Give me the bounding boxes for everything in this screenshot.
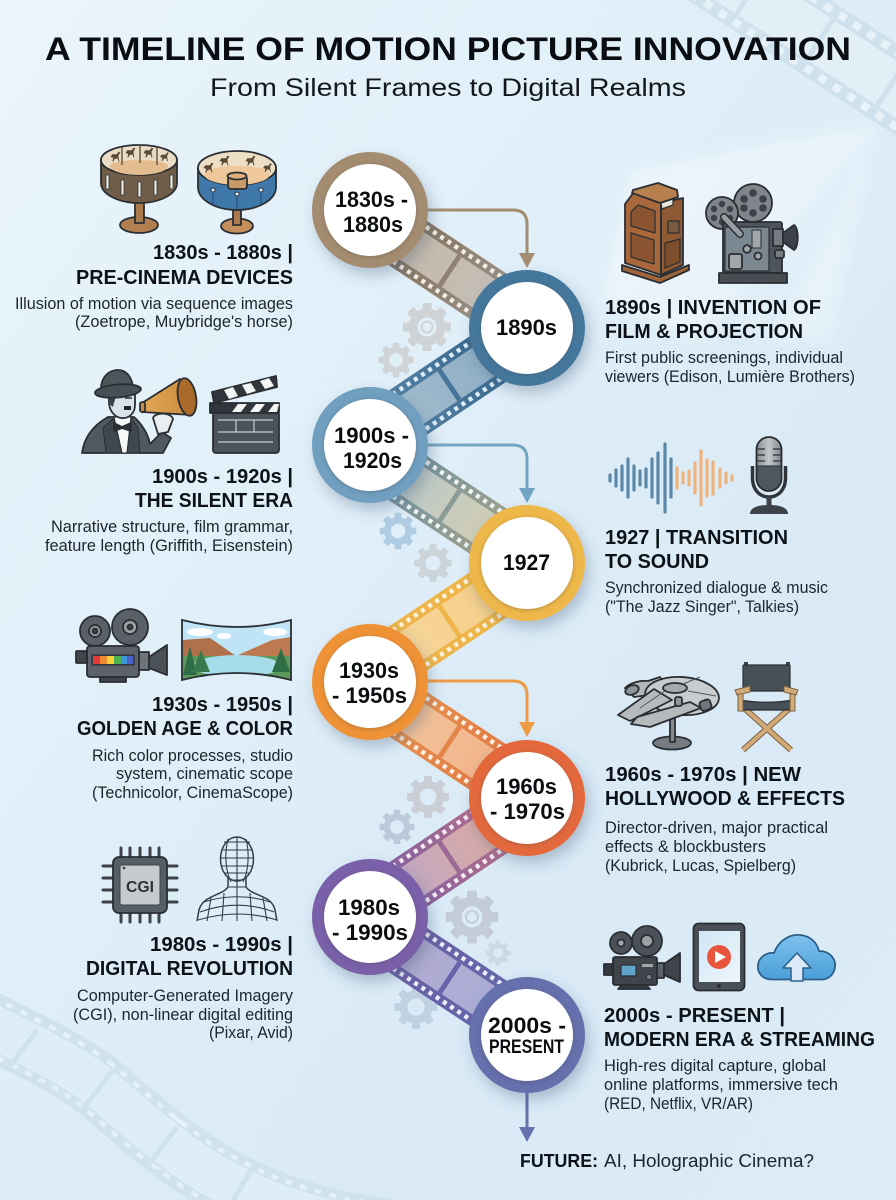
background film strip top right: [687, 0, 896, 141]
description: Rich color processes, studio: [92, 747, 293, 765]
description: (CGI), non-linear digital editing: [73, 1006, 293, 1024]
node: 2000s - present: [469, 977, 585, 1093]
panel: modern era & streaming: [604, 924, 875, 1113]
node: 1890s: [469, 270, 585, 386]
panel: the silent era: [45, 370, 293, 555]
description: (Technicolor, CinemaScope): [92, 784, 293, 802]
heading: [77, 693, 293, 740]
panel: new hollywood & effects: [605, 662, 845, 875]
film strip: 1830s to 1890s: [354, 194, 543, 346]
heading: FILM & PROJECTION: [605, 320, 803, 343]
description: (Pixar, Avid): [209, 1024, 293, 1042]
decorative gears: [379, 303, 510, 1029]
description: [605, 579, 828, 616]
description: High-res digital capture, global: [604, 1057, 826, 1075]
heading: PRE-CINEMA DEVICES: [76, 266, 293, 289]
icon: kinetoscope: [622, 183, 689, 283]
heading: 1960s - 1970s | NEW: [605, 763, 802, 786]
icon: film projector: [706, 184, 798, 283]
title: A TIMELINE OF MOTION PICTURE INNOVATION: [45, 31, 851, 67]
node: 1830s - 1880s: 1830s -: [335, 187, 408, 212]
arrow: 2000s to future: [519, 1092, 535, 1142]
description: [92, 747, 293, 802]
heading: THE SILENT ERA: [135, 489, 293, 512]
description: effects & blockbusters: [605, 838, 766, 856]
arrow: 1930s to 1960s: [426, 681, 535, 737]
description: feature length (Griffith, Eisenstein): [45, 537, 293, 555]
arrow: 1900s to 1927: [426, 445, 535, 503]
description: [73, 987, 294, 1042]
subtitle: From Silent Frames to Digital Realms: [210, 74, 686, 102]
heading: TO SOUND: [605, 550, 709, 573]
heading: 1980s - 1990s |: [150, 933, 293, 956]
node: 1900s - 1920s: 1920s: [343, 448, 402, 473]
heading: [86, 933, 293, 980]
icon: sound waveform: [610, 444, 732, 512]
panel: golden age & color: [76, 609, 293, 802]
film strip: 1927 to 1930s: [354, 545, 542, 698]
heading: [605, 526, 788, 573]
node: 1900s - 1920s: 1900s -: [334, 423, 409, 448]
heading: [604, 1004, 875, 1051]
description: system, cinematic scope: [116, 765, 293, 783]
film strip: 1960s to 1980s: [354, 781, 542, 934]
arrow: 1830s to 1890s: [426, 210, 535, 268]
film strip: 1980s to 2000s: [354, 901, 543, 1053]
description: (Zoetrope, Muybridge's horse): [75, 313, 293, 331]
node: 1960s - 1970s: - 1970s: [490, 799, 565, 824]
node: 1900s - 1920s: [312, 387, 428, 503]
icon: digital cinema camera: [604, 926, 680, 989]
icon: spaceship model: [618, 674, 720, 750]
node: 1960s - 1970s: [469, 740, 585, 856]
node: 1927: [469, 505, 585, 621]
description: [605, 349, 855, 386]
description: Director-driven, major practical: [605, 819, 828, 837]
node: 1927: 1927: [503, 550, 550, 575]
icon: clapperboard: [210, 376, 279, 453]
panel: invention of film & projection: [605, 183, 855, 386]
icon: silent film actor with megaphone: [82, 370, 199, 453]
future callout: AI, Holographic Cinema?: [604, 1150, 814, 1171]
heading: [605, 763, 845, 810]
heading: 2000s - PRESENT |: [604, 1004, 785, 1027]
heading: 1927 | TRANSITION: [605, 526, 788, 549]
node: 1890s: 1890s: [496, 315, 557, 340]
node: 1980s - 1990s: - 1990s: [332, 920, 408, 945]
icon: tablet with play button: [694, 924, 744, 990]
heading: DIGITAL REVOLUTION: [86, 957, 293, 980]
heading: 1890s | INVENTION OF: [605, 296, 821, 319]
description: Computer-Generated Imagery: [77, 987, 294, 1005]
icon: cloud upload: [758, 935, 835, 981]
heading: MODERN ERA & STREAMING: [604, 1028, 875, 1051]
icon: CGI chip: CGI: [126, 879, 154, 896]
heading: 1930s - 1950s |: [152, 693, 293, 716]
description: [604, 1057, 838, 1113]
heading: [135, 465, 293, 512]
panel: transition to sound: [605, 437, 828, 616]
heading: [76, 241, 293, 289]
description: First public screenings, individual: [605, 349, 843, 367]
description: Narrative structure, film grammar,: [51, 518, 293, 536]
description: Illusion of motion via sequence images: [15, 295, 293, 313]
description: Synchronized dialogue & music: [605, 579, 828, 597]
node: 2000s - present: 2000s -: [488, 1013, 566, 1038]
description: [45, 518, 293, 555]
icon: director's chair: [735, 662, 798, 750]
icon: microphone: [750, 437, 788, 514]
icon: zoetrope: [101, 145, 177, 233]
description: ("The Jazz Singer", Talkies): [605, 598, 799, 616]
film strip: 1890s to 1900s: [354, 309, 542, 462]
description: [605, 819, 828, 875]
node: 1980s - 1990s: [312, 859, 428, 975]
node: 1830s - 1880s: 1880s: [343, 212, 403, 237]
panel: pre-cinema devices: [15, 145, 293, 331]
description: (RED, Netflix, VR/AR): [604, 1095, 753, 1113]
heading: GOLDEN AGE & COLOR: [77, 717, 293, 740]
description: online platforms, immersive tech: [604, 1076, 838, 1094]
heading: HOLLYWOOD & EFFECTS: [605, 787, 845, 810]
heading: 1830s - 1880s |: [153, 241, 293, 264]
background light beams: [600, 122, 878, 340]
icon: zoopraxiscope: [198, 151, 276, 234]
node: 1930s - 1950s: - 1950s: [332, 683, 407, 708]
icon: technicolor camera: [76, 609, 167, 682]
panel: digital revolution: [73, 837, 294, 1042]
film strip: 1930s to 1960s: [354, 665, 543, 817]
node: 1960s - 1970s: 1960s: [496, 774, 557, 799]
description: viewers (Edison, Lumière Brothers): [605, 368, 855, 386]
icon: CGI chip: [103, 848, 177, 922]
icon: wireframe human: [197, 837, 277, 921]
heading: [605, 296, 821, 343]
description: [15, 295, 293, 331]
node: 1830s - 1880s: [312, 152, 428, 268]
node: 1930s - 1950s: 1930s: [339, 658, 399, 683]
node: 1980s - 1990s: 1980s: [338, 895, 400, 920]
film strip: 1900s to 1927: [354, 429, 543, 581]
node: 2000s - present: PRESENT: [489, 1037, 564, 1058]
background film strip bottom left: [0, 1020, 460, 1200]
node: 1930s - 1950s: [312, 624, 428, 740]
future callout: FUTURE:: [520, 1151, 598, 1171]
future callout: [520, 1150, 814, 1171]
description: (Kubrick, Lucas, Spielberg): [605, 857, 796, 875]
heading: 1900s - 1920s |: [152, 465, 293, 488]
icon: CinemaScope widescreen: [182, 618, 292, 682]
